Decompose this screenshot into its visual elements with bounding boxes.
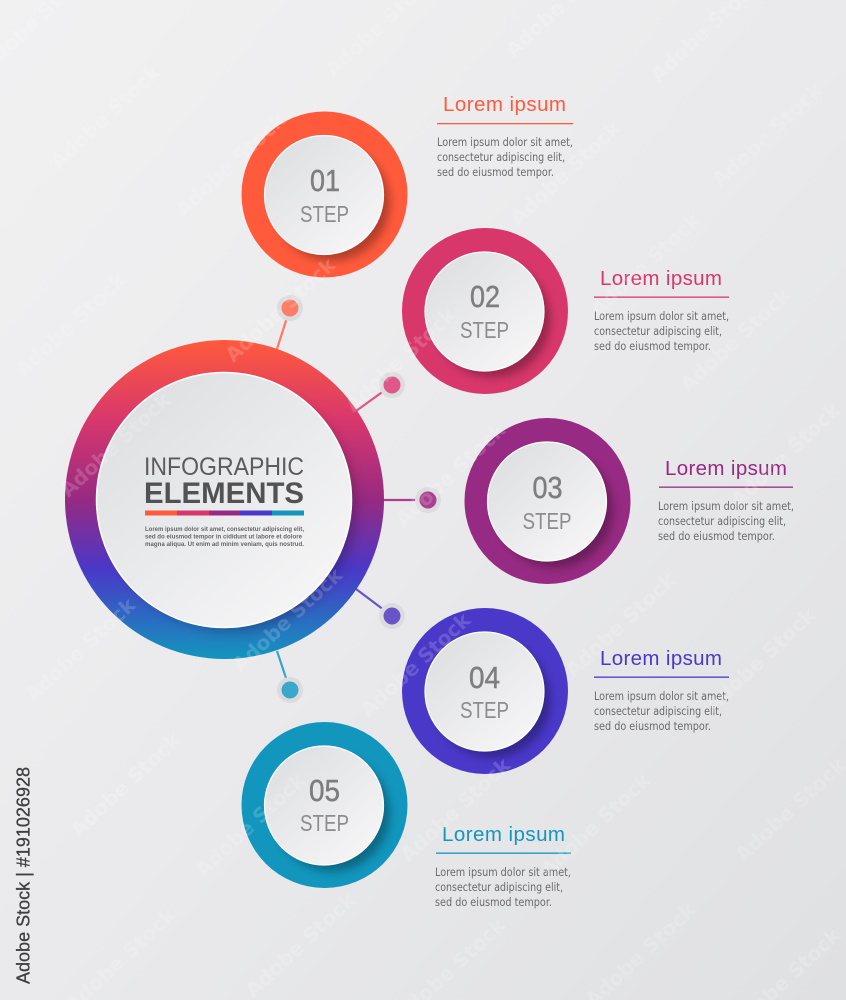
watermarks: Adobe Stock — [725, 397, 846, 512]
watermarks: Adobe Stock — [20, 592, 141, 707]
color bar — [145, 510, 304, 516]
main description: sed do eiusmod tempor in cididunt ut labore et dolore — [145, 534, 302, 540]
step 2 circle: 02 — [470, 279, 500, 314]
main description: Lorem ipsum dolor sit amet, consectetur adipiscing elit, — [145, 526, 304, 533]
step 4 circle: STEP — [460, 697, 509, 723]
step 3 circle: STEP — [522, 508, 572, 534]
main description: magna aliqua. Ut enim ad minim veniam, quis nostrud. — [145, 541, 304, 548]
step 2 text: Lorem ipsum — [600, 267, 722, 290]
step 2 text: Lorem ipsum dolor sit amet, — [594, 310, 729, 323]
connector 5 — [277, 651, 303, 703]
connector 1 — [277, 295, 303, 349]
step 2 text: consectetur adipiscing elit, — [594, 325, 722, 338]
watermarks: Adobe Stock — [355, 607, 476, 722]
main description — [145, 526, 304, 548]
step 2 circle — [402, 228, 568, 394]
watermarks: Adobe Stock — [45, 59, 166, 174]
step 1 text: Lorem ipsum — [443, 93, 566, 116]
watermarks: Adobe Stock — [170, 107, 291, 222]
step 5 circle: 05 — [309, 773, 340, 808]
watermarks: Adobe Stock — [10, 267, 131, 382]
step 5 text: Lorem ipsum dolor sit amet, — [435, 866, 571, 879]
step 2 text — [594, 267, 729, 353]
watermarks: Adobe Stock — [227, 562, 348, 677]
step 5 circle: STEP — [300, 810, 349, 836]
step 2 circle: STEP — [460, 317, 509, 343]
main title: ELEMENTS — [144, 477, 304, 510]
watermarks: Adobe Stock — [395, 752, 516, 867]
step 5 text: sed do eiusmod tempor. — [435, 896, 552, 909]
step 1 circle: 01 — [310, 163, 340, 198]
watermarks: Adobe Stock — [707, 77, 828, 192]
watermarks: Adobe Stock — [240, 887, 361, 1000]
step 3 text: sed do eiusmod tempor. — [658, 530, 775, 543]
step 3 text: Lorem ipsum — [665, 457, 787, 480]
step 5 text: Lorem ipsum — [442, 823, 565, 846]
step 3 circle — [464, 418, 630, 584]
step 2 text: sed do eiusmod tempor. — [594, 340, 711, 353]
step 1 text: consectetur adipiscing elit, — [437, 151, 565, 164]
connector 4 — [356, 589, 405, 629]
step 5 circle — [242, 722, 408, 888]
step 4 text — [594, 647, 729, 733]
step 1 circle — [242, 112, 408, 278]
step 4 circle — [402, 608, 568, 774]
main title — [144, 453, 304, 510]
step 4 circle: 04 — [469, 660, 500, 695]
watermarks: Adobe Stock — [505, 115, 626, 230]
stock credit: Adobe Stock | #191026928 — [14, 767, 34, 984]
step 5 text — [435, 823, 571, 909]
step 5 text: consectetur adipiscing elit, — [435, 881, 563, 894]
step 1 text: Lorem ipsum dolor sit amet, — [437, 136, 573, 149]
main title: INFOGRAPHIC — [144, 453, 304, 481]
step 3 circle: 03 — [532, 470, 562, 505]
connector 3 — [384, 487, 441, 513]
watermarks: Adobe Stock — [65, 727, 186, 842]
step 4 text: consectetur adipiscing elit, — [594, 705, 722, 718]
watermarks: Adobe Stock — [390, 417, 511, 532]
step 1 text — [437, 93, 573, 179]
watermarks: Adobe Stock — [340, 302, 461, 417]
step 1 circle: STEP — [300, 201, 349, 227]
watermarks: Adobe Stock — [560, 567, 681, 682]
step 3 text — [658, 457, 794, 543]
step 4 text: Lorem ipsum — [600, 647, 722, 670]
watermarks: Adobe Stock — [535, 767, 656, 882]
step 4 text: Lorem ipsum dolor sit amet, — [594, 690, 729, 703]
watermarks: Adobe Stock — [700, 602, 821, 717]
watermarks: Adobe Stock — [585, 207, 706, 322]
watermarks: Adobe Stock — [675, 282, 796, 397]
watermarks: Adobe Stock — [190, 767, 311, 882]
step 3 text: consectetur adipiscing elit, — [658, 515, 786, 528]
watermarks: Adobe Stock — [220, 252, 341, 367]
step 4 text: sed do eiusmod tempor. — [594, 720, 711, 733]
step 3 text: Lorem ipsum dolor sit amet, — [658, 500, 794, 513]
step 1 text: sed do eiusmod tempor. — [437, 166, 554, 179]
watermarks: Adobe Stock — [55, 387, 176, 502]
main circle — [65, 340, 384, 659]
connector 2 — [356, 372, 405, 411]
